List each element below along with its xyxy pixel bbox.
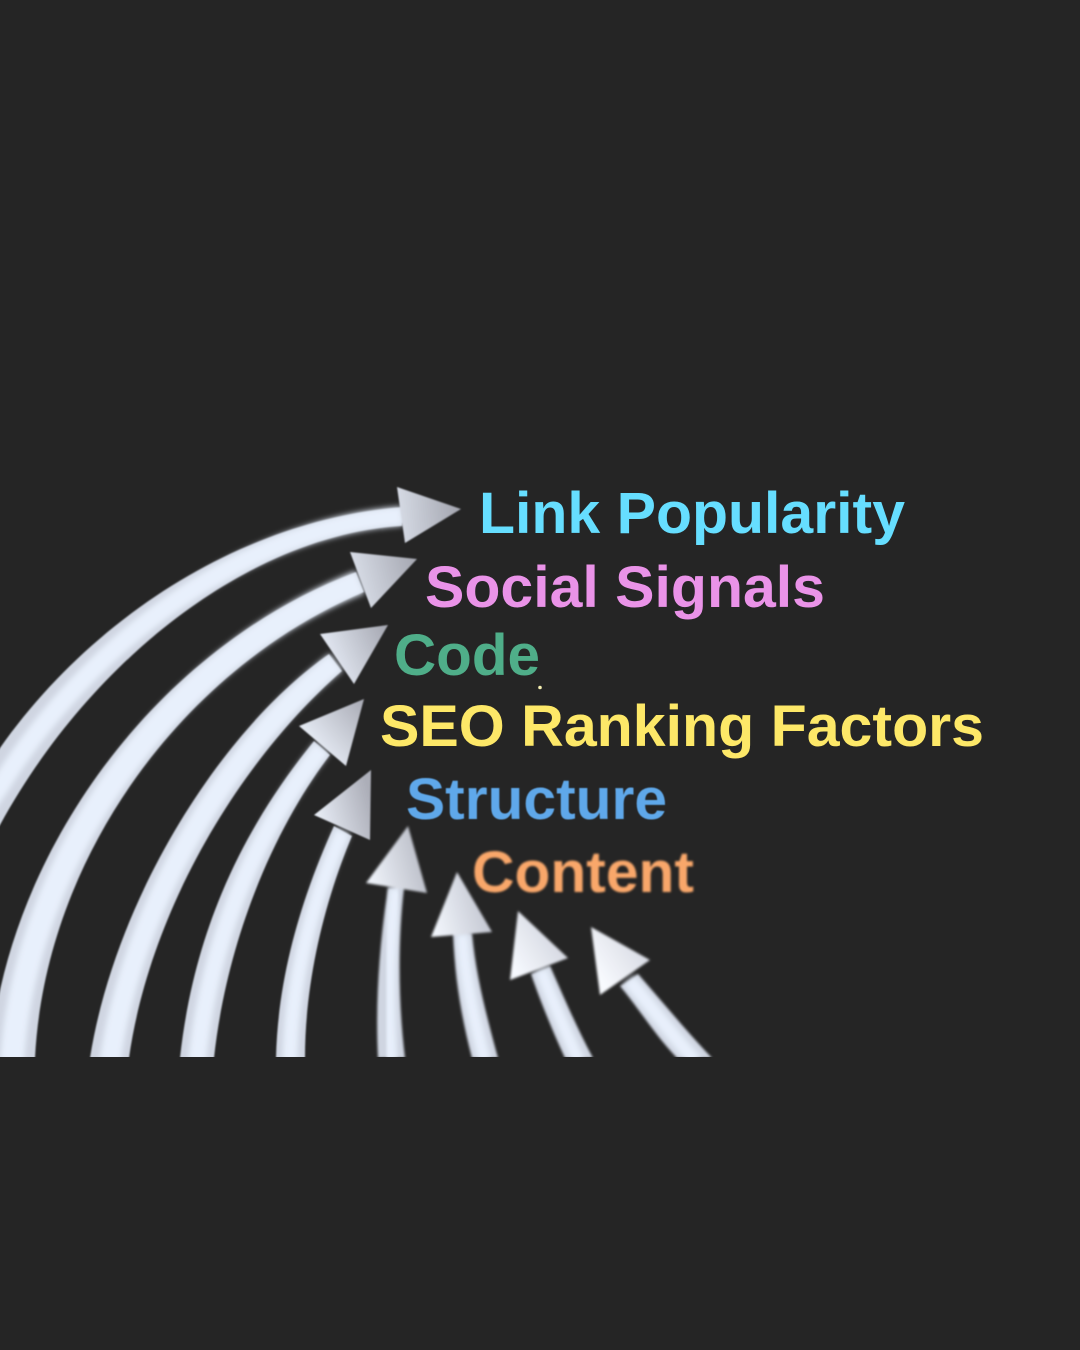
arrow: column seven xyxy=(431,872,498,1062)
label: SEO Ranking Factors: SEO Ranking Factors xyxy=(380,694,984,759)
arrow: SEO Ranking Factors xyxy=(180,699,364,1062)
arrow: column eight xyxy=(510,911,593,1062)
arrow: Link Popularity xyxy=(0,487,461,870)
label: Structure: Structure xyxy=(406,767,667,832)
arrow: Code xyxy=(90,625,388,1062)
arrow: Structure xyxy=(276,770,371,1062)
infographic: SEO ranking factors arrows xyxy=(0,486,982,1057)
arrow: Social Signals xyxy=(0,552,417,1062)
arrow: column six xyxy=(366,826,427,1062)
arrow: column nine xyxy=(591,927,712,1062)
dot xyxy=(538,686,542,689)
label: Code: Code xyxy=(394,623,540,688)
label: Social Signals: Social Signals xyxy=(425,555,825,620)
label: Link Popularity: Link Popularity xyxy=(479,481,905,546)
label: Content: Content xyxy=(472,840,694,905)
